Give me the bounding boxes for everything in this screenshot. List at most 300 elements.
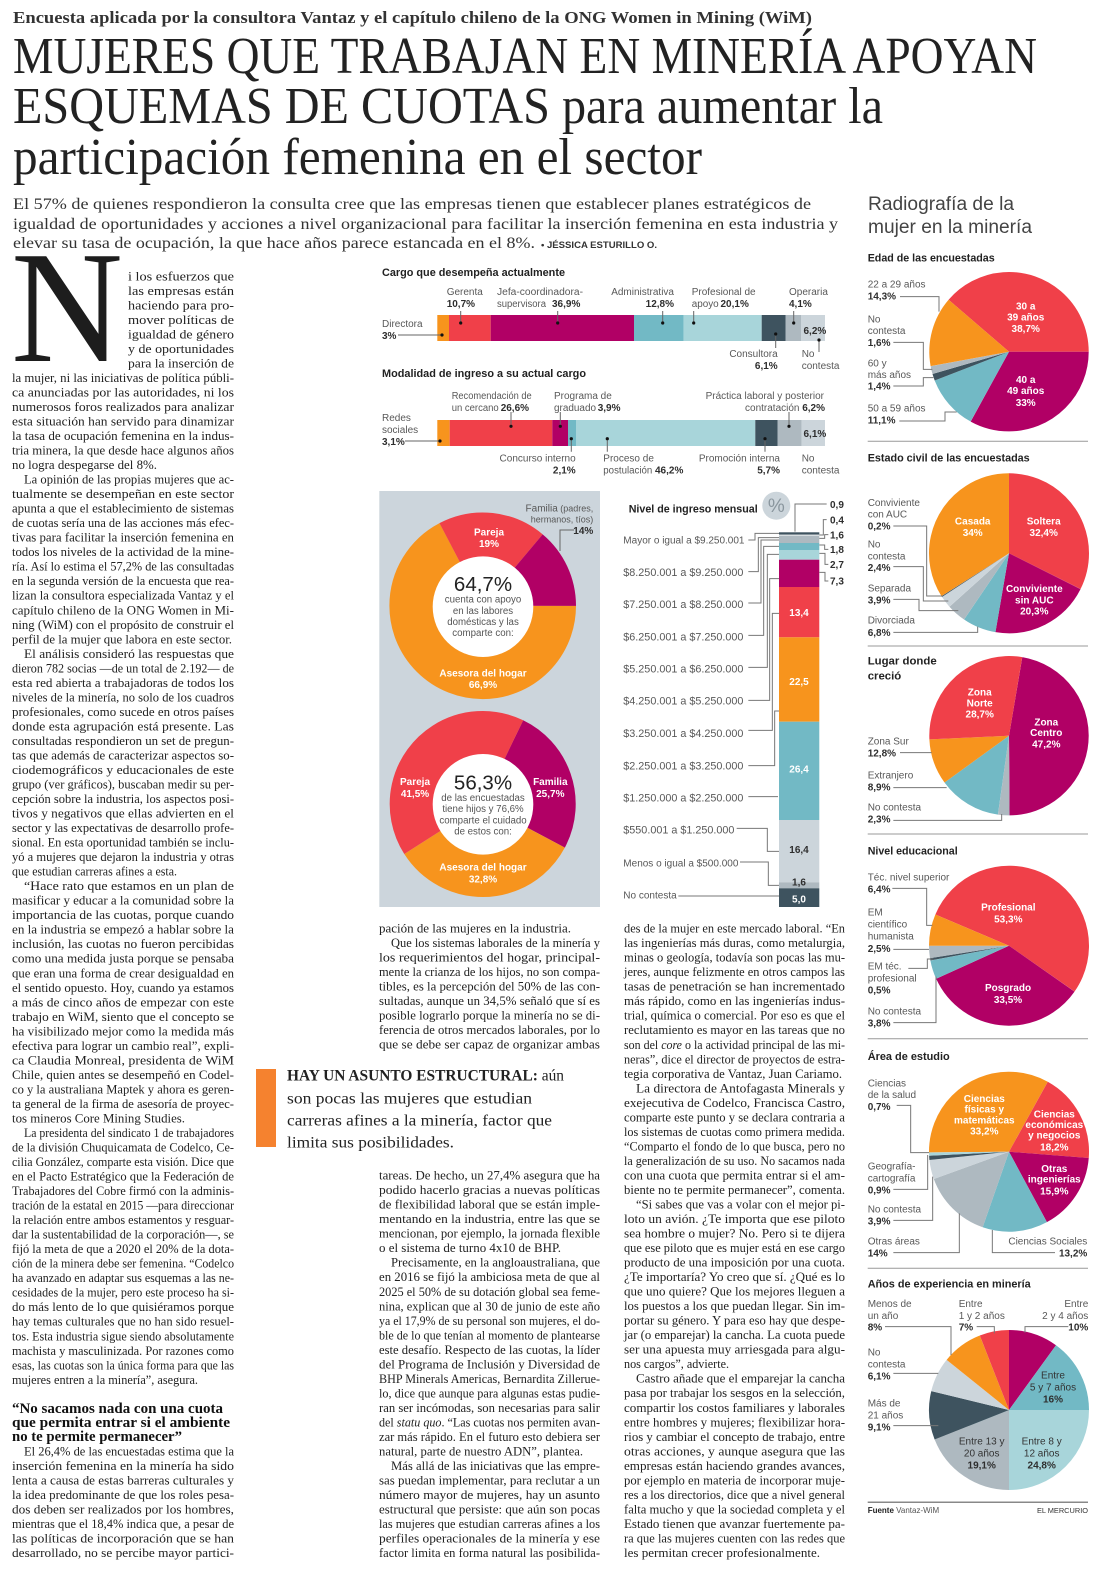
- panel background: [379, 491, 600, 907]
- labels: lugar: No contesta: [868, 803, 922, 814]
- paragraph 5: cesidades de la mujer, pero este proceso ha si-: [12, 1285, 234, 1300]
- article column 3: que ese piloto que es mujer está en ese cargo: [624, 1240, 845, 1255]
- article column 2, top: ferencia de otros mercados laborales, por lo: [379, 1022, 600, 1037]
- values right of column: [830, 500, 844, 588]
- labels: cargo: Gerenta: [447, 287, 483, 298]
- labels: estado civil: Soltera: [1027, 516, 1061, 527]
- paragraph 2: ría. Así lo estima el 57,2% de las consultadas: [12, 559, 234, 574]
- labels: experiencia: [868, 1299, 1089, 1471]
- paragraph 4: trabajo en WiM, siento que el concepto se: [12, 1009, 234, 1024]
- title: ESQUEMAS DE CUOTAS para aumentar la: [13, 78, 883, 135]
- article column 3: son del core o la actividad principal de las mi-: [624, 1037, 845, 1052]
- labels: educacional: EM téc.: [868, 961, 902, 972]
- paragraph 1: esta situación han servido para dinamizar: [12, 414, 235, 428]
- income labels: $4.250.001 a $5.250.000: [623, 696, 743, 708]
- labels: edad: 49 años: [1007, 386, 1045, 397]
- article column 3: neras”, dice el director de proyectos de estra-: [624, 1051, 845, 1066]
- article column 2, top: que se debe ser capaz de organizar ambas: [379, 1037, 600, 1052]
- pie panel: lugar donde creció: [868, 656, 1065, 826]
- paragraph 1: para la inserción de: [128, 355, 234, 370]
- paragraph 2: en la segunda versión de la encuesta que rea-: [12, 573, 234, 588]
- paragraph 5: cilia González, comparte esta visión. Dice que: [12, 1154, 234, 1169]
- donut: apoyo en labores domésticas: Asesora del hogar: [439, 668, 527, 680]
- leaders: área: [893, 1105, 1055, 1253]
- paragraph 4: co y la australiana Maptek y ahora es geren-: [12, 1081, 234, 1096]
- article column 2, bottom: Más allá de las iniciativas que las empre-: [391, 1458, 600, 1473]
- paragraph 4: [12, 878, 234, 1126]
- labels: lugar: Zona: [968, 687, 992, 698]
- paragraph 5: esas, las cuotas son la única forma para que las: [12, 1357, 234, 1372]
- paragraph 3: que estudian carreras afines a esta.: [12, 864, 177, 879]
- article column 2, top: mente la crianza de los hijos, no son compa-: [379, 964, 600, 979]
- article column 3: los puestos a los que puedan llegar. Sin im-: [624, 1298, 845, 1313]
- article column 3: ra que las mujeres cuenten con las redes que: [624, 1530, 845, 1545]
- labels: cargo: supervisora: [497, 299, 546, 310]
- labels: experiencia: 12 años: [1024, 1449, 1059, 1460]
- deck: El 57% de quienes respondieron la consulta cree que las empresas tienen que establecer planes estratégicos de: [13, 196, 811, 213]
- labels: estado civil: Conviviente: [868, 498, 920, 509]
- labels: experiencia: 5 y 7 años: [1030, 1383, 1076, 1394]
- labels: modalidad: No: [802, 454, 815, 464]
- labels: estado civil: 2,4%: [868, 563, 891, 574]
- article column 2, bottom: tareas. De hecho, un 27,4% asegura que ha: [379, 1168, 600, 1183]
- income labels: $8.250.001 a $9.250.000: [623, 567, 743, 579]
- paragraph 2: perfil de la mujer que labora en este sector.: [12, 631, 232, 646]
- paragraph 4: el sentido opuesto. Hoy, cuando ya estamos: [12, 980, 234, 995]
- labels: modalidad: Recomendación de: [452, 391, 532, 402]
- donut: cuidado de hijos: Familia: [533, 777, 568, 788]
- paragraph 5: dar la sustentabilidad de la corporación—, se: [12, 1227, 234, 1242]
- article column 2, bottom: del Programa de Inclusión y Diversidad de: [379, 1356, 600, 1371]
- labels: educacional: Profesional: [981, 903, 1036, 914]
- labels: edad: 14,3%: [868, 291, 896, 302]
- article column 3: jar (o emparejar) la cancha. La cuota puede: [623, 1327, 845, 1342]
- labels: modalidad: 3,9%: [598, 403, 621, 414]
- deck: elevar su tasa de ocupación, la que hace años parece estancada en el 8%.: [13, 235, 535, 252]
- heading: lugar: creció: [868, 670, 901, 682]
- article column 1: [12, 268, 235, 1560]
- paragraph 3: dieron 782 socias —de un total de 2.192— de: [12, 660, 234, 675]
- labels: cargo: 6,2%: [804, 326, 826, 337]
- labels: edad: 22 a 29 años: [868, 279, 926, 290]
- paragraph 5: mujeres entren a la minería”, asegura.: [12, 1372, 198, 1387]
- labels: cargo: contesta: [802, 361, 840, 372]
- paragraph 3: [12, 646, 234, 879]
- labels: estado civil: 6,8%: [868, 628, 891, 639]
- paragraph 1: mover políticas de: [128, 312, 234, 327]
- labels: edad: más años: [868, 370, 911, 381]
- labels: edad: 1,4%: [868, 382, 891, 393]
- labels: estado civil: Separada: [868, 584, 912, 595]
- labels: cargo: 36,9%: [552, 299, 580, 310]
- callout: asunto estructural: carreras afines a la minería, factor que: [287, 1112, 552, 1130]
- paragraph 1: no logra despegarse del 8%.: [12, 457, 157, 472]
- article column 3: minas o geología, todavía son pocas las mu-: [624, 950, 845, 965]
- labels: educacional: 2,5%: [868, 944, 891, 955]
- article column 3: las ingenierías más duras, como metalurgia,: [624, 935, 845, 950]
- labels: experiencia: 8%: [868, 1323, 882, 1334]
- labels: cargo: Administrativa: [611, 287, 674, 298]
- paragraph 4: efectiva para lograr un cambio real”, expli-: [12, 1038, 234, 1053]
- paragraph 2: [12, 472, 235, 646]
- article column 3: La directora de Antofagasta Minerals y: [636, 1080, 846, 1095]
- labels: modalidad: 6,1%: [804, 429, 826, 440]
- labels: educacional: Téc. nivel superior: [868, 872, 950, 883]
- article column 3: tasas de penetración se han incrementado: [624, 979, 845, 994]
- article column 2, top: [379, 920, 600, 1052]
- labels: lugar: [868, 687, 1062, 826]
- paragraph 3: profesionales, como sucede en otros países: [12, 704, 234, 719]
- article column 3: con una cuota que permita entrar si el am-: [624, 1167, 845, 1182]
- labels: educacional: [868, 872, 1036, 1029]
- donut: apoyo en labores domésticas: 64,7%: [454, 573, 512, 596]
- paragraph 6: la idea predominante de que los roles pesa-: [12, 1487, 234, 1502]
- labels: experiencia: 1 y 2 años: [959, 1311, 1005, 1322]
- labels: cargo: [382, 287, 840, 372]
- article column 3: otras acciones, y aunque asegura que las: [624, 1443, 845, 1458]
- article column 3: portar su género. Y para eso hay que despe-: [624, 1313, 845, 1328]
- icon: percent: [762, 492, 790, 520]
- article column 2, bottom: este desafío. Respecto de las cuotas, la líder: [379, 1342, 601, 1357]
- income labels: No contesta: [623, 891, 677, 902]
- paragraph 3: yó a mujeres que dejaron la industria y otras: [12, 849, 234, 864]
- paragraph 4: como una medida justa porque se pensaba: [12, 951, 234, 966]
- labels: modalidad: Proceso de: [603, 454, 654, 464]
- labels: modalidad: 46,2%: [655, 466, 683, 477]
- labels: cargo: Jefa-coordinadora-: [497, 287, 583, 298]
- leaders: cargo: [398, 311, 821, 352]
- paragraph 4: masificar y educar a la comunidad sobre la: [12, 893, 234, 908]
- paragraph 1: numerosos foros realizados para analizar: [12, 399, 235, 414]
- callout: asunto estructural: [256, 1068, 564, 1152]
- paragraph 3: grupo (ver gráficos), buscaban medir su per-: [12, 776, 234, 792]
- paragraph 6: inserción femenina en la minería ha sido: [12, 1458, 234, 1473]
- callout: asunto estructural: son pocas las mujeres que estudian: [287, 1090, 532, 1108]
- sidebar heading: [868, 194, 1032, 238]
- labels: área: matemáticas: [954, 1115, 1015, 1126]
- article column 3: tegia corporativa de Vantaz, Juan Cariamo.: [624, 1066, 842, 1081]
- labels: área: Ciencias: [1034, 1109, 1075, 1120]
- article column 2, bottom: BHP Minerals Americas, Bernardita Zillerue-: [379, 1371, 600, 1386]
- leaders: edad: [893, 297, 957, 421]
- paragraph 1: [12, 268, 235, 472]
- donut: apoyo en labores domésticas: [417, 528, 548, 691]
- paragraph 4: “Hace rato que estamos en un plan de: [24, 878, 234, 893]
- labels: cargo: No: [802, 349, 815, 360]
- leaders: ingreso: [678, 504, 828, 896]
- article column 2, bottom: en 2016 se fijó la ambiciosa meta de que al: [379, 1269, 600, 1284]
- labels: estado civil: No: [868, 540, 881, 551]
- labels: área: Otras áreas: [868, 1237, 920, 1248]
- labels: área: 3,9%: [868, 1217, 891, 1228]
- paragraph 2: de cuotas sería una de las acciones más efec-: [12, 515, 234, 530]
- labels: estado civil: [868, 498, 1063, 639]
- leaders: experiencia: [885, 1327, 1068, 1426]
- heading: ingreso: Nivel de ingreso mensual: [629, 504, 758, 516]
- article column 3: más rápido, como en las ingenierías indus-: [624, 993, 845, 1008]
- article column 2, bottom: sas puedan implementar, para reclutar a un: [379, 1472, 600, 1488]
- labels: lugar: 8,9%: [868, 783, 891, 794]
- article column 3: ser una apuesta muy arriesgada para algu-: [624, 1342, 845, 1357]
- values right of column: 1,8: [830, 545, 844, 556]
- source credit: [868, 1506, 1088, 1515]
- labels: edad: 38,7%: [1012, 324, 1040, 335]
- labels: lugar: Extranjero: [868, 771, 914, 782]
- labels: área: 14%: [868, 1249, 888, 1260]
- article column 2, top: sultadas, aunque un 34,5% señaló que sí es: [379, 993, 600, 1008]
- labels: modalidad: un cercano: [452, 403, 499, 414]
- article column 2, bottom: natural, parte de nuestro ADN”, plantea.: [379, 1444, 583, 1458]
- paragraph 2: tivas para facilitar la inserción femenina en: [12, 530, 234, 545]
- labels: educacional: profesional: [868, 974, 917, 985]
- paragraph 2: apunta a que el establecimiento de sistemas: [12, 501, 234, 516]
- labels: área: 0,7%: [868, 1102, 891, 1113]
- heading: estado civil: Estado civil de las encuestadas: [868, 452, 1030, 464]
- article column 2, top: posible lograrlo porque la minería no se di-: [379, 1007, 600, 1022]
- paragraph 5: Trabajadores del Cobre firmó con la adminis-: [12, 1183, 234, 1198]
- labels: experiencia: Menos de: [868, 1299, 912, 1310]
- paragraph 2: La opinión de las propias mujeres que ac-: [24, 472, 234, 487]
- paragraph 3: esta red abierta a trabajadoras de todos los: [12, 675, 234, 690]
- labels: educacional: 3,8%: [868, 1018, 891, 1029]
- labels: modalidad: 3,1%: [382, 437, 405, 448]
- bar segments: cargo: [437, 315, 825, 341]
- labels: modalidad: 26,6%: [501, 403, 529, 414]
- donut: apoyo en labores domésticas: 19%: [479, 539, 499, 550]
- labels: estado civil: 3,9%: [868, 595, 891, 606]
- labels: estado civil: Divorciada: [868, 616, 915, 627]
- donut: cuidado de hijos: Asesora del hogar: [439, 863, 527, 874]
- labels: experiencia: 10%: [1068, 1323, 1088, 1334]
- pie panel: área de estudio: [868, 1050, 1087, 1260]
- paragraph 5: la relación entre ambos estamentos y resguar-: [12, 1212, 234, 1227]
- paragraph 1: tria minera, la que desde hace algunos años: [12, 442, 234, 458]
- paragraph 6: mientras que el 18,4% indica que, a pesar de: [12, 1516, 234, 1531]
- labels: área: Ciencias Sociales: [1008, 1237, 1087, 1248]
- labels: lugar: 2,3%: [868, 815, 891, 826]
- paragraph 6: El 26,4% de las encuestadas estima que la: [24, 1444, 234, 1459]
- labels: área: y negocios: [1028, 1131, 1081, 1142]
- paragraph 1: la tasa de ocupación femenina en la indus-: [12, 428, 234, 443]
- values right of column: 1,6: [830, 530, 844, 541]
- labels: modalidad: 6,2%: [802, 403, 825, 414]
- paragraph 1: las empresas están: [128, 283, 235, 298]
- article column 3: exejecutiva de Codelco, Francisca Castro,: [624, 1095, 845, 1110]
- labels: modalidad: Programa de: [554, 391, 612, 402]
- subheading quote: [12, 1401, 230, 1445]
- labels: experiencia: un año: [868, 1311, 899, 1322]
- paragraph 6: lenta a causa de estas barreras culturales y: [12, 1473, 234, 1488]
- paragraph 4: que eran una forma de crear desigualdad en: [12, 965, 234, 980]
- callout: familia: [526, 503, 593, 551]
- values right of column: 7,3: [830, 577, 844, 588]
- pie: educacional: [953, 890, 1065, 1001]
- labels: área: Ciencias: [964, 1094, 1005, 1105]
- article column 2, bottom: podido hacerlo gracias a nuevas políticas: [379, 1182, 600, 1197]
- paragraph 4: inclusión, las cuotas no fueron percibidas: [12, 936, 234, 951]
- article column 3: producto de una imposición por una cuota.: [624, 1255, 845, 1270]
- paragraph 2: tualmente se desempeñan en este sector: [12, 486, 235, 501]
- labels: experiencia: Más de: [868, 1398, 901, 1409]
- heading: cargo: Cargo que desempeña actualmente: [382, 267, 565, 279]
- article column 3: Castro añade que el emparejar la cancha: [636, 1371, 845, 1386]
- article column 3: les permitan crecer profesionalmente.: [624, 1545, 820, 1560]
- labels: cargo: Consultora: [729, 349, 778, 360]
- article column 3: compartir los costos familiares y laborales: [624, 1400, 845, 1415]
- labels: área: de la salud: [868, 1090, 916, 1101]
- article column 3: biente no te permite permanecer”, comenta.: [624, 1182, 845, 1197]
- article column 2, bottom: de flexibilidad laboral que se están imple-: [379, 1197, 600, 1212]
- article column 2, bottom: del statu quo. “Las cuotas nos permiten avan-: [379, 1414, 600, 1429]
- article column 2, bottom: perfiles operacionales de la minería y ese: [379, 1531, 600, 1546]
- labels: experiencia: Entre: [1041, 1371, 1065, 1382]
- article column 2, top: los requerimientos del hogar, principal-: [379, 949, 600, 964]
- paragraph 3: cepción sobre la industria, los aspectos posi-: [12, 791, 234, 806]
- paragraph 1: igualdad de género: [128, 326, 234, 341]
- labels: cargo: 6,1%: [755, 361, 778, 372]
- article column 3: la generalización de su uso. No sacamos nada: [624, 1153, 845, 1168]
- labels: edad: No: [868, 314, 881, 325]
- paragraph 5: do más lento de lo que quisiéramos porque: [12, 1299, 234, 1314]
- article column 3: jeres, aunque felizmente en otros campos las: [623, 964, 845, 979]
- article column 2, bottom: ya el 17,9% de su personal son mujeres, el do-: [379, 1313, 600, 1328]
- labels: edad: 60 y: [868, 358, 887, 369]
- income labels: $5.250.001 a $6.250.000: [623, 663, 743, 675]
- article column 2, bottom: mencionan, por ejemplo, la jornada flexible: [379, 1226, 600, 1241]
- paragraph 1: ca anunciadas por las autoridades, ni los: [12, 384, 234, 400]
- labels: área: No contesta: [868, 1205, 922, 1216]
- labels: modalidad: Concurso interno: [500, 454, 576, 464]
- values right of column: 2,7: [830, 560, 844, 571]
- labels: estado civil: Casada: [955, 516, 991, 527]
- donut: apoyo en labores domésticas: en las labores: [453, 606, 513, 617]
- paragraph 4: tos mineros Core Mining Studies.: [12, 1110, 185, 1126]
- article column 3: falta mucho y que la sociedad completa y el: [624, 1501, 845, 1516]
- article column 2, bottom: número mayor de mujeres, hay un asunto: [379, 1487, 600, 1502]
- deck: igualdad de oportunidades y acciones a nivel organizacional para facilitar la inserción femenina en esta industria y: [13, 216, 838, 233]
- values in column: [789, 608, 809, 906]
- labels: modalidad: 2,1%: [553, 466, 576, 477]
- paragraph 3: sector y las expectativas de desarrollo profe-: [12, 820, 234, 835]
- article column 2, bottom: zar más rápido. En el futuro esto debiera ser: [379, 1429, 601, 1444]
- labels: educacional: No contesta: [868, 1006, 922, 1017]
- labels: edad: 11,1%: [868, 416, 896, 427]
- values in column: 1,6: [792, 878, 806, 889]
- donut: cuidado de hijos: 56,3%: [454, 772, 512, 794]
- income labels: Mayor o igual a $9.250.001: [623, 536, 745, 547]
- leaders: lugar: [893, 753, 1002, 820]
- article column 2, bottom: ble de lo que tenían al momento de plantearse: [379, 1327, 600, 1342]
- labels: experiencia: 7%: [959, 1323, 973, 1334]
- paragraph 1: y de oportunidades: [128, 341, 234, 356]
- labels: lugar: Zona Sur: [868, 736, 910, 747]
- labels: área: físicas y: [965, 1105, 1004, 1116]
- paragraph 4: en la industria se empezó a hablar sobre la: [12, 922, 234, 937]
- donut: cuidado de hijos: [400, 740, 568, 886]
- income labels: $550.001 a $1.250.000: [623, 825, 734, 837]
- subheading quote: “No sacamos nada con una cuota: [12, 1401, 223, 1417]
- article column 3: Estado tienen que avanzar fuertemente pa-: [624, 1516, 845, 1531]
- labels: estado civil: sin AUC: [1015, 595, 1054, 606]
- leaders: educacional: [892, 888, 936, 1023]
- leaders: estado civil: [893, 526, 978, 632]
- source credit: Fuente Vantaz-WiM: [868, 1506, 939, 1515]
- article column 2, bottom: estructural que persiste: que aún son pocas: [379, 1502, 600, 1517]
- article column 2, bottom: 2025 el 50% de su dotación global sea feme-: [379, 1284, 600, 1299]
- kicker: Encuesta aplicada por la consultora Vantaz y el capítulo chileno de la ONG Women in Mining (WiM): [13, 8, 812, 27]
- values in column: 26,4: [789, 764, 809, 776]
- pie panel: estado civil: [868, 452, 1065, 639]
- labels: experiencia: 19,1%: [968, 1460, 996, 1471]
- article column 3: “Comparto el fondo de lo que busca, pero no: [624, 1138, 845, 1153]
- article column 3: loto un avión. ¿Te importa que ese piloto: [624, 1211, 845, 1226]
- labels: experiencia: contesta: [868, 1360, 906, 1371]
- labels: experiencia: Entre: [1064, 1299, 1089, 1310]
- paragraph 5: en el Pacto Estratégico que la Federación de: [12, 1168, 234, 1184]
- labels: edad: 33%: [1016, 398, 1036, 409]
- paragraph 6: dos deben ser realizados por los hombres,: [12, 1502, 234, 1517]
- labels: edad: 40 a: [1016, 375, 1036, 386]
- labels: experiencia: 24,8%: [1028, 1460, 1056, 1471]
- callout: asunto estructural: limita sus posibilidades.: [287, 1134, 454, 1152]
- paragraph 6: las políticas de incorporación que se han: [12, 1531, 235, 1546]
- article column 3: des de la mujer en este mercado laboral. “En: [624, 921, 845, 936]
- labels: área: 33,2%: [970, 1127, 999, 1138]
- labels: cargo: Directora: [382, 319, 423, 330]
- title: participación femenina en el sector: [13, 129, 702, 186]
- labels: cargo: 3%: [382, 331, 397, 342]
- labels: educacional: EM: [868, 908, 883, 919]
- source credit: EL MERCURIO: [1037, 1506, 1088, 1515]
- labels: modalidad: graduado: [554, 403, 596, 414]
- paragraph 5: fijó la meta de que a 2020 el 20% de la dota-: [12, 1241, 234, 1256]
- labels: área: ingenierías: [1028, 1175, 1081, 1186]
- labels: estado civil: Conviviente: [1006, 584, 1063, 595]
- article column 3: nos cargos”, advierte.: [624, 1356, 729, 1371]
- donut: cuidado de hijos: de las encuestadas: [441, 793, 525, 804]
- paragraph 5: machista y masculinizada. Por razones como: [12, 1343, 234, 1358]
- heading: área: Área de estudio: [868, 1050, 950, 1063]
- paragraph 3: consultadas respondieron un set de pregun-: [12, 733, 234, 748]
- article column 2, bottom: factor limita en forma natural las posibilida-: [379, 1545, 600, 1560]
- article column 3: empresas están haciendo grandes avances,: [624, 1458, 845, 1473]
- labels: área: [868, 1078, 1087, 1260]
- income labels: $2.250.001 a $3.250.000: [623, 760, 743, 772]
- chart: nivel de ingreso mensual: [623, 492, 844, 907]
- labels: área: Ciencias: [868, 1078, 906, 1089]
- paragraph 3: tas que además de caracterizar aspectos so-: [12, 748, 234, 762]
- article column 2, bottom: [379, 1168, 601, 1560]
- labels: lugar: Centro: [1030, 728, 1062, 739]
- stacked bar chart: modalidad: [382, 368, 840, 477]
- paragraph 2: todos los niveles de la actividad de la mine-: [12, 544, 234, 559]
- stacked bar chart: cargo: [382, 267, 840, 372]
- deck: [13, 196, 838, 252]
- paragraph 6: desarrollado, no se percibe mayor partici-: [12, 1545, 234, 1560]
- labels: cargo: Profesional de: [692, 287, 756, 298]
- labels: educacional: 6,4%: [868, 884, 891, 895]
- labels: educacional: 53,3%: [994, 915, 1023, 926]
- labels: cargo: 4,1%: [789, 299, 812, 310]
- sidebar heading: mujer en la minería: [868, 217, 1032, 238]
- donut: cuidado de hijos: 25,7%: [536, 789, 565, 800]
- pie: experiencia: [953, 1354, 1065, 1466]
- article column 3: rios y cambiar el concepto de trabajo, entre: [624, 1429, 845, 1444]
- article column 2, bottom: nina, explican que al 30 de junio de este año: [379, 1298, 600, 1313]
- labels: modalidad: Promoción interna: [699, 454, 780, 464]
- values in column: 13,4: [789, 608, 809, 619]
- labels: modalidad: contratación: [745, 403, 800, 414]
